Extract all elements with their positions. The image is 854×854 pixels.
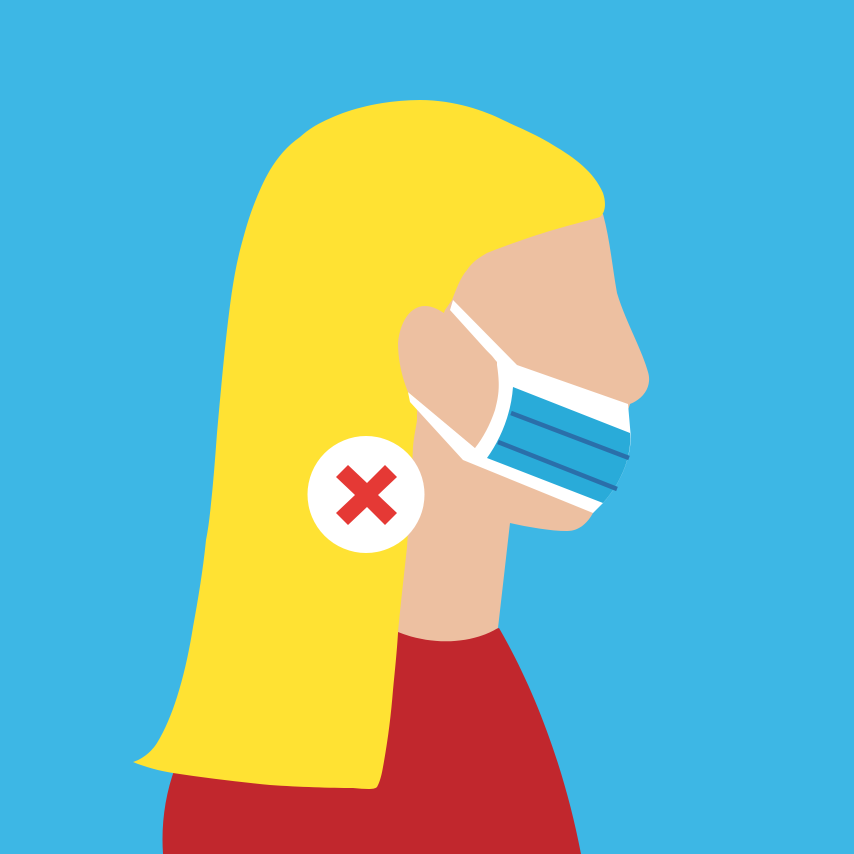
mask white body and straps — [408, 300, 631, 513]
neck and face — [398, 214, 649, 641]
badge circle — [308, 436, 424, 553]
red shirt — [162, 625, 581, 854]
wrong-way badge — [308, 436, 424, 553]
ear — [398, 306, 499, 448]
yellow hair — [133, 100, 605, 789]
mask blue panel — [487, 387, 630, 503]
mask pleat lines — [498, 413, 629, 489]
red cross icon — [336, 465, 397, 525]
face mask — [408, 300, 631, 513]
